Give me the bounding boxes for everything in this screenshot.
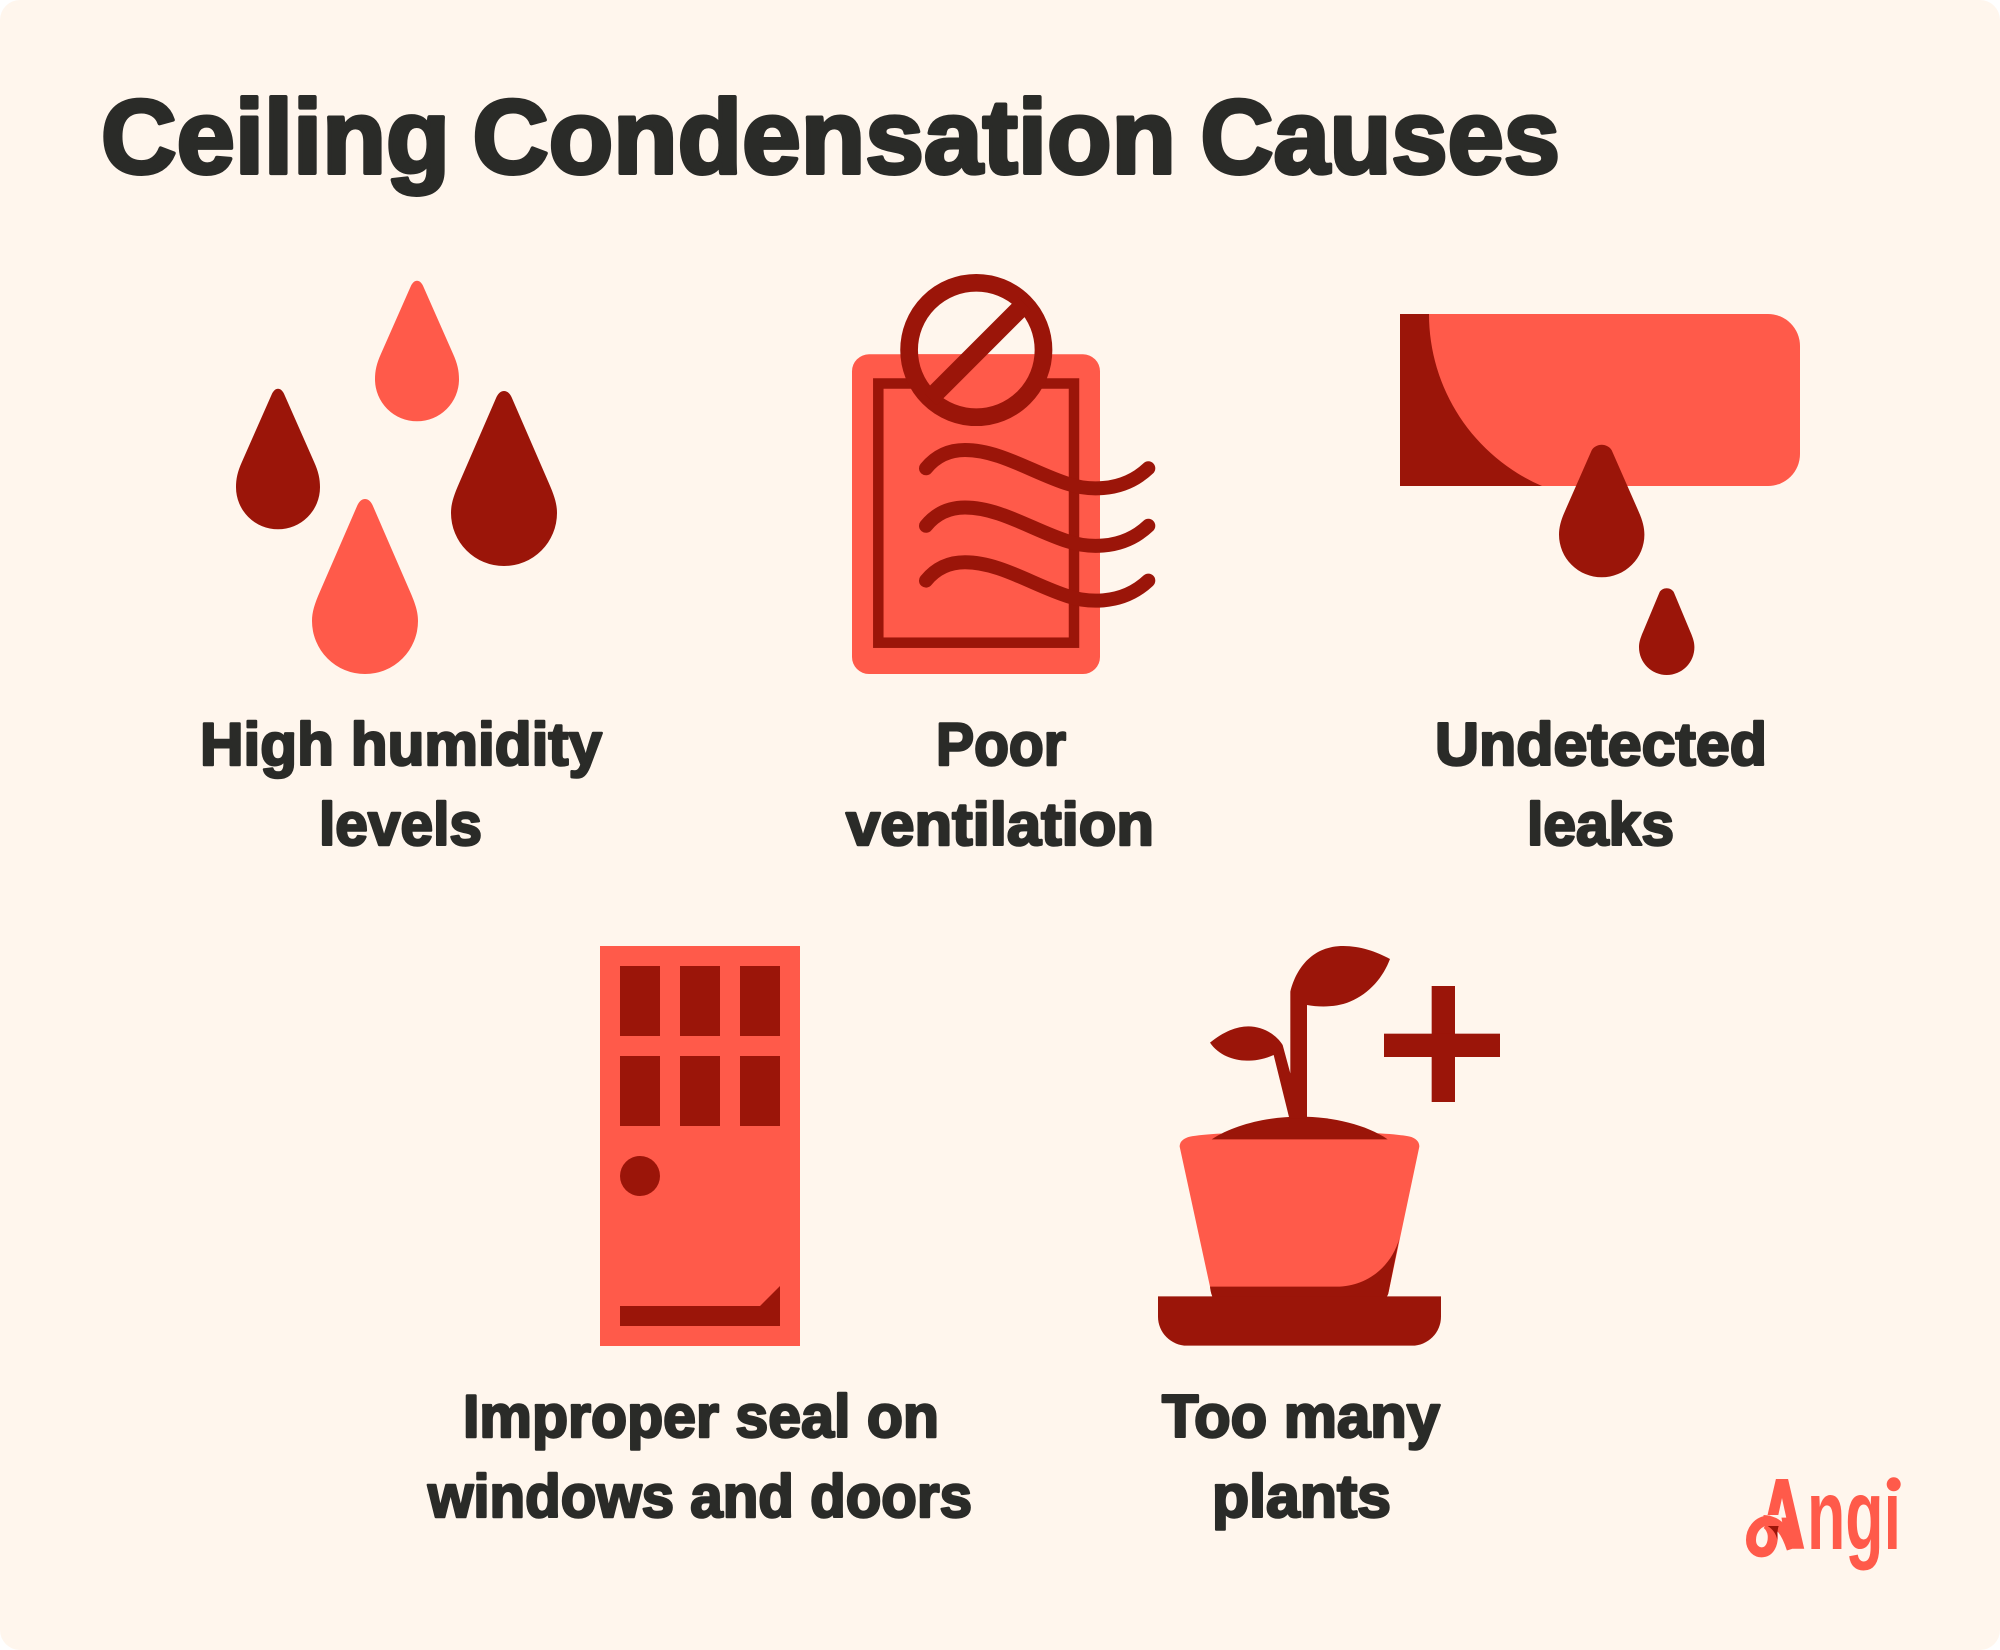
label: too many plants: Too many [1162, 1383, 1441, 1450]
title [101, 79, 1560, 196]
logo: Angi [1746, 1477, 1901, 1570]
panel: improper seal [427, 946, 972, 1530]
label: improper seal on windows and doors: windows and doors [427, 1463, 972, 1530]
label: poor ventilation [846, 711, 1154, 858]
title: Ceiling [101, 79, 450, 196]
title: Causes [1200, 79, 1560, 196]
label: high humidity levels: levels [319, 791, 482, 858]
icon: blocked vent with air waves [852, 283, 1148, 674]
title: Condensation [472, 79, 1176, 196]
label: high humidity levels: High humidity [200, 711, 603, 778]
panel: too many plants [1158, 946, 1500, 1530]
label: undetected leaks: Undetected [1435, 711, 1767, 778]
panel: undetected leaks [1400, 314, 1800, 858]
panel: poor ventilation [846, 283, 1154, 858]
label: improper seal on windows and doors: Improper seal on [463, 1383, 939, 1450]
label: poor ventilation: Poor [936, 711, 1066, 778]
icon: potted plant with plus [1158, 946, 1500, 1346]
label: undetected leaks [1435, 711, 1767, 858]
icon: door [600, 946, 800, 1346]
label: too many plants: plants [1212, 1463, 1391, 1530]
icon: water drops [236, 281, 557, 674]
icon: leaking pipe [1400, 314, 1800, 675]
panel: high humidity levels [200, 281, 603, 858]
logo: Angi: ngi [1807, 1459, 1901, 1571]
label: improper seal on windows and doors [427, 1383, 972, 1530]
label: poor ventilation: ventilation [846, 791, 1154, 858]
label: too many plants [1162, 1383, 1441, 1530]
label: high humidity levels [200, 711, 603, 858]
logo: Angi: A [1760, 1461, 1804, 1568]
label: undetected leaks: leaks [1527, 791, 1674, 858]
